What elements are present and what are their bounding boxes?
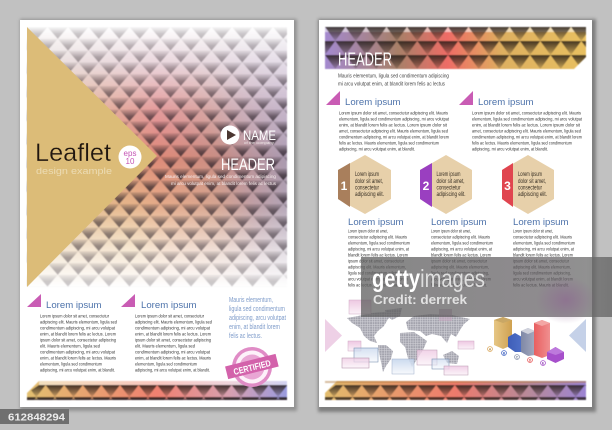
text block lower 2: elementum, ligula sed condimentum	[431, 240, 493, 246]
text block lower 1: adipiscing, mi arcu volutpat enim, at	[348, 246, 410, 252]
3D bar chart: A	[489, 347, 492, 351]
text block right 2: enim, at blandit lorem felis ac lectus. Lorem ipsum dolor sit	[472, 122, 581, 128]
3D bar chart: E	[542, 361, 545, 365]
icon: pink triangle 2	[121, 294, 135, 307]
text block column 2: Lorem ipsum dolor sit amet, consectetur	[135, 314, 204, 318]
icon: pink triangle right 2	[459, 91, 473, 105]
hexagon 1: adipiscing elit.	[355, 192, 384, 198]
text block lower 3: ligula sed condimentum adipiscing,	[513, 270, 571, 276]
blue side text: felis ac lectus.	[229, 333, 262, 340]
cover text	[165, 174, 277, 186]
text block lower 2: adipiscing, mi arcu volutpat enim, at	[431, 246, 493, 252]
text block lower 3: ipsum dolor sit amet, consectetur	[513, 258, 569, 264]
blue side text: enim, at blandit lorem	[229, 324, 280, 331]
hexagon 2: dolor sit amet,	[436, 179, 465, 185]
blue side text: adipiscing, arcu volutpat	[229, 315, 286, 322]
text block column 1: Lorem ipsum dolor sit amet, consectetur	[40, 314, 109, 318]
panel: right leaflet page	[318, 19, 596, 412]
text block lower 2	[431, 228, 493, 288]
text block column 2: elementum, ligula sed condimentum	[135, 362, 197, 366]
text block column 2: enim, at blandit lorem felis ac lectus. Mauris	[135, 356, 212, 360]
hexagon 2: adipiscing elit.	[436, 192, 466, 198]
header title: HEADER	[338, 50, 392, 70]
heading: Lorem ipsum: Lorem ipsum	[46, 300, 101, 311]
panel: left leaflet page	[20, 19, 297, 411]
3D bar chart: B	[503, 351, 506, 355]
3D bar chart: D	[529, 358, 532, 362]
heading lower 1: Lorem ipsum	[348, 217, 403, 228]
hexagon 1	[338, 155, 391, 214]
text block column 1	[40, 314, 117, 372]
text block column 2: adipiscing elit. Mauris elementum, ligula sed	[135, 320, 212, 324]
world map chart	[342, 300, 474, 375]
text block column 1: elit. Mauris elementum, ligula sed	[40, 344, 100, 348]
text block right 1: Lorem ipsum dolor sit amet, consectetur adipiscing elit. Mauris	[339, 110, 449, 116]
text block lower 1: arcu volutpat enim, at blandit lorem	[348, 276, 408, 282]
cover text: Mauris elementum, ligula sed condimentum adipiscing	[165, 174, 276, 179]
heading: Lorem ipsum 2: Lorem ipsum	[141, 300, 196, 311]
text block right 2: condimentum adipiscing, mi arcu volutpat enim, at blandit lorem	[472, 134, 582, 140]
text block lower 3: adipiscing, mi arcu volutpat enim, at	[513, 246, 575, 252]
image id tag	[0, 409, 69, 424]
text block lower 2: blandit lorem felis ac lectus. Lorem	[431, 252, 491, 258]
text block column 2: enim, at blandit lorem felis ac lectus. Lorem	[135, 332, 211, 336]
text block column 1: enim, at blandit lorem felis ac lectus. Mauris	[40, 356, 117, 360]
text block lower 1: ligula sed condimentum adipiscing,	[348, 270, 406, 276]
company name: NAME	[243, 127, 276, 143]
intro text: Mauris elementum, ligula sed condimentum adipiscing	[338, 74, 449, 80]
text block lower 3: arcu volutpat enim, at blandit lorem	[513, 276, 573, 282]
certified stamp	[225, 347, 279, 387]
text block lower 1: felis ac lectus. Mauris at blandit.	[348, 282, 404, 288]
heading right 2: Lorem ipsum	[478, 97, 533, 108]
hexagon 1: 1	[341, 179, 348, 193]
icon: play logo	[220, 126, 240, 144]
icon: pink triangle 1	[27, 294, 41, 307]
hexagon 3: dolor sit amet,	[518, 179, 546, 185]
hexagon 3: Lorem ipsum	[518, 172, 542, 178]
text block column 2: adipiscing, mi arcu volutpat enim, at blandit.	[135, 368, 210, 372]
text block column 1: condimentum adipiscing, mi arcu volutpat	[40, 350, 116, 354]
hexagon 3: adipiscing elit.	[518, 192, 547, 198]
text block lower 2: felis ac lectus. Mauris at blandit.	[431, 282, 487, 288]
heading lower 2: Lorem ipsum	[431, 217, 486, 228]
subtitle: design example	[36, 166, 112, 176]
watermark band	[361, 257, 612, 324]
bottom band	[27, 381, 287, 400]
text block lower 2: ipsum dolor sit amet, consectetur	[431, 258, 487, 264]
hexagon 3	[502, 155, 554, 214]
blue side text: Mauris elementum,	[229, 297, 273, 304]
text block right 2: Lorem ipsum dolor sit amet, consectetur adipiscing elit. Mauris	[472, 110, 582, 116]
text block lower 2: ligula sed condimentum adipiscing,	[431, 270, 489, 276]
blue side text	[229, 297, 286, 340]
text block right 1: amet, consectetur adipiscing elit. Mauris elementum, ligula sed	[339, 128, 448, 134]
text block right 2: amet, consectetur adipiscing elit. Mauris elementum, ligula sed	[472, 128, 581, 134]
header band	[325, 27, 586, 69]
text block lower 2: adipiscing elit. Mauris elementum,	[431, 264, 489, 270]
hexagon 2: Lorem ipsum	[436, 172, 460, 178]
text block lower 2: Lorem ipsum dolor sit amet,	[431, 228, 471, 234]
text block lower 1: Lorem ipsum dolor sit amet,	[348, 228, 388, 234]
eps badge	[118, 146, 142, 168]
text block right 2: felis ac lectus. Mauris elementum, ligula sed condimentum	[472, 140, 572, 146]
text block right 1: adipiscing, mi arcu volutpat enim, at blandit.	[339, 146, 415, 152]
text block column 2: condimentum adipiscing, mi arcu volutpat	[135, 350, 211, 354]
gold cover triangle	[27, 27, 157, 287]
text block right 1: enim, at blandit lorem felis ac lectus. Lorem ipsum dolor sit	[339, 122, 448, 128]
eps badge: 10	[126, 157, 135, 166]
text block column 1: enim, at blandit lorem felis ac lectus. Lorem	[40, 332, 116, 336]
text block column 2: ipsum dolor sit amet, consectetur adipiscing	[135, 338, 211, 342]
text block right 1: elementum, ligula sed condimentum adipiscing, mi arcu volutpat	[339, 116, 450, 122]
company name: of the company	[244, 141, 274, 145]
text block lower 3	[513, 228, 575, 288]
text block lower 3: consectetur adipiscing elit. Mauris	[513, 234, 573, 240]
text block right 2	[472, 110, 583, 152]
hexagon 2	[420, 155, 472, 214]
text block column 1: ipsum dolor sit amet, consectetur adipiscing	[40, 338, 116, 342]
text block right 2: elementum, ligula sed condimentum adipiscing, mi arcu volutpat	[472, 116, 583, 122]
text block lower 1	[348, 228, 410, 288]
hexagon 2: consectetur	[436, 186, 460, 192]
heading lower 3: Lorem ipsum	[513, 217, 568, 228]
text block right 1	[339, 110, 450, 152]
watermark credit: Credit: derrrek	[373, 293, 467, 307]
text block lower 3: elementum, ligula sed condimentum	[513, 240, 575, 246]
bottom band right	[325, 381, 586, 400]
text block column 1: adipiscing, mi arcu volutpat enim, at blandit.	[40, 368, 115, 372]
text block lower 3: Lorem ipsum dolor sit amet,	[513, 228, 553, 234]
certified stamp: CERTIFIED	[232, 358, 272, 377]
hexagon 3: consectetur	[518, 186, 542, 192]
hexagon 2: 2	[423, 179, 430, 193]
text block lower 2: arcu volutpat enim, at blandit lorem	[431, 276, 491, 282]
heading right 1: Lorem ipsum	[345, 97, 400, 108]
text block right 1: felis ac lectus. Mauris elementum, ligula sed condimentum	[339, 140, 439, 146]
pink arrow triangle	[325, 319, 342, 352]
text block lower 3: felis ac lectus. Mauris at blandit.	[513, 282, 569, 288]
hexagon 1: Lorem ipsum	[355, 172, 379, 178]
hexagon 1: dolor sit amet,	[355, 179, 383, 185]
3D bar chart: C	[516, 355, 519, 359]
text block lower 1: blandit lorem felis ac lectus. Lorem	[348, 252, 408, 258]
text block lower 1: consectetur adipiscing elit. Mauris	[348, 234, 408, 240]
text block right 1: condimentum adipiscing, mi arcu volutpat enim, at blandit lorem	[339, 134, 449, 140]
cover header: HEADER	[221, 155, 275, 174]
blue arrow triangle	[569, 319, 586, 352]
3D bar chart	[488, 317, 564, 365]
intro text: mi arcu volutpat enim, at blandit lorem felis ac lectus	[338, 82, 445, 88]
cover triangle pattern	[27, 27, 287, 287]
text block lower 1: ipsum dolor sit amet, consectetur	[348, 258, 404, 264]
title: Leaflet: Leaflet	[35, 139, 111, 167]
eps badge: eps	[124, 149, 136, 158]
icon: pink triangle right 1	[326, 91, 340, 105]
cover text: mi arcu volutpat enim, at blandit lorem felis ac lectus	[171, 181, 277, 186]
blue side text: ligula sed condimentum	[229, 306, 285, 313]
text block column 2: condimentum adipiscing, mi arcu volutpat	[135, 326, 211, 330]
text block column 1: condimentum adipiscing, mi arcu volutpat	[40, 326, 116, 330]
text block column 1: elementum, ligula sed condimentum	[40, 362, 102, 366]
hexagon 3: 3	[504, 179, 511, 193]
text block right 2: adipiscing, mi arcu volutpat enim, at blandit.	[472, 146, 548, 152]
text block lower 1: elementum, ligula sed condimentum	[348, 240, 410, 246]
intro text	[338, 74, 449, 88]
text block lower 1: adipiscing elit. Mauris elementum,	[348, 264, 406, 270]
hexagon 1: consectetur	[355, 186, 379, 192]
text block lower 3: adipiscing elit. Mauris elementum,	[513, 264, 571, 270]
image id tag: 612848294	[8, 412, 65, 424]
watermark logo: gettyimages	[372, 265, 485, 293]
text block column 2	[135, 314, 212, 372]
text block column 1: adipiscing elit. Mauris elementum, ligula sed	[40, 320, 117, 324]
text block column 2: elit. Mauris elementum, ligula sed	[135, 344, 195, 348]
text block lower 2: consectetur adipiscing elit. Mauris	[431, 234, 491, 240]
text block lower 3: blandit lorem felis ac lectus. Lorem	[513, 252, 573, 258]
